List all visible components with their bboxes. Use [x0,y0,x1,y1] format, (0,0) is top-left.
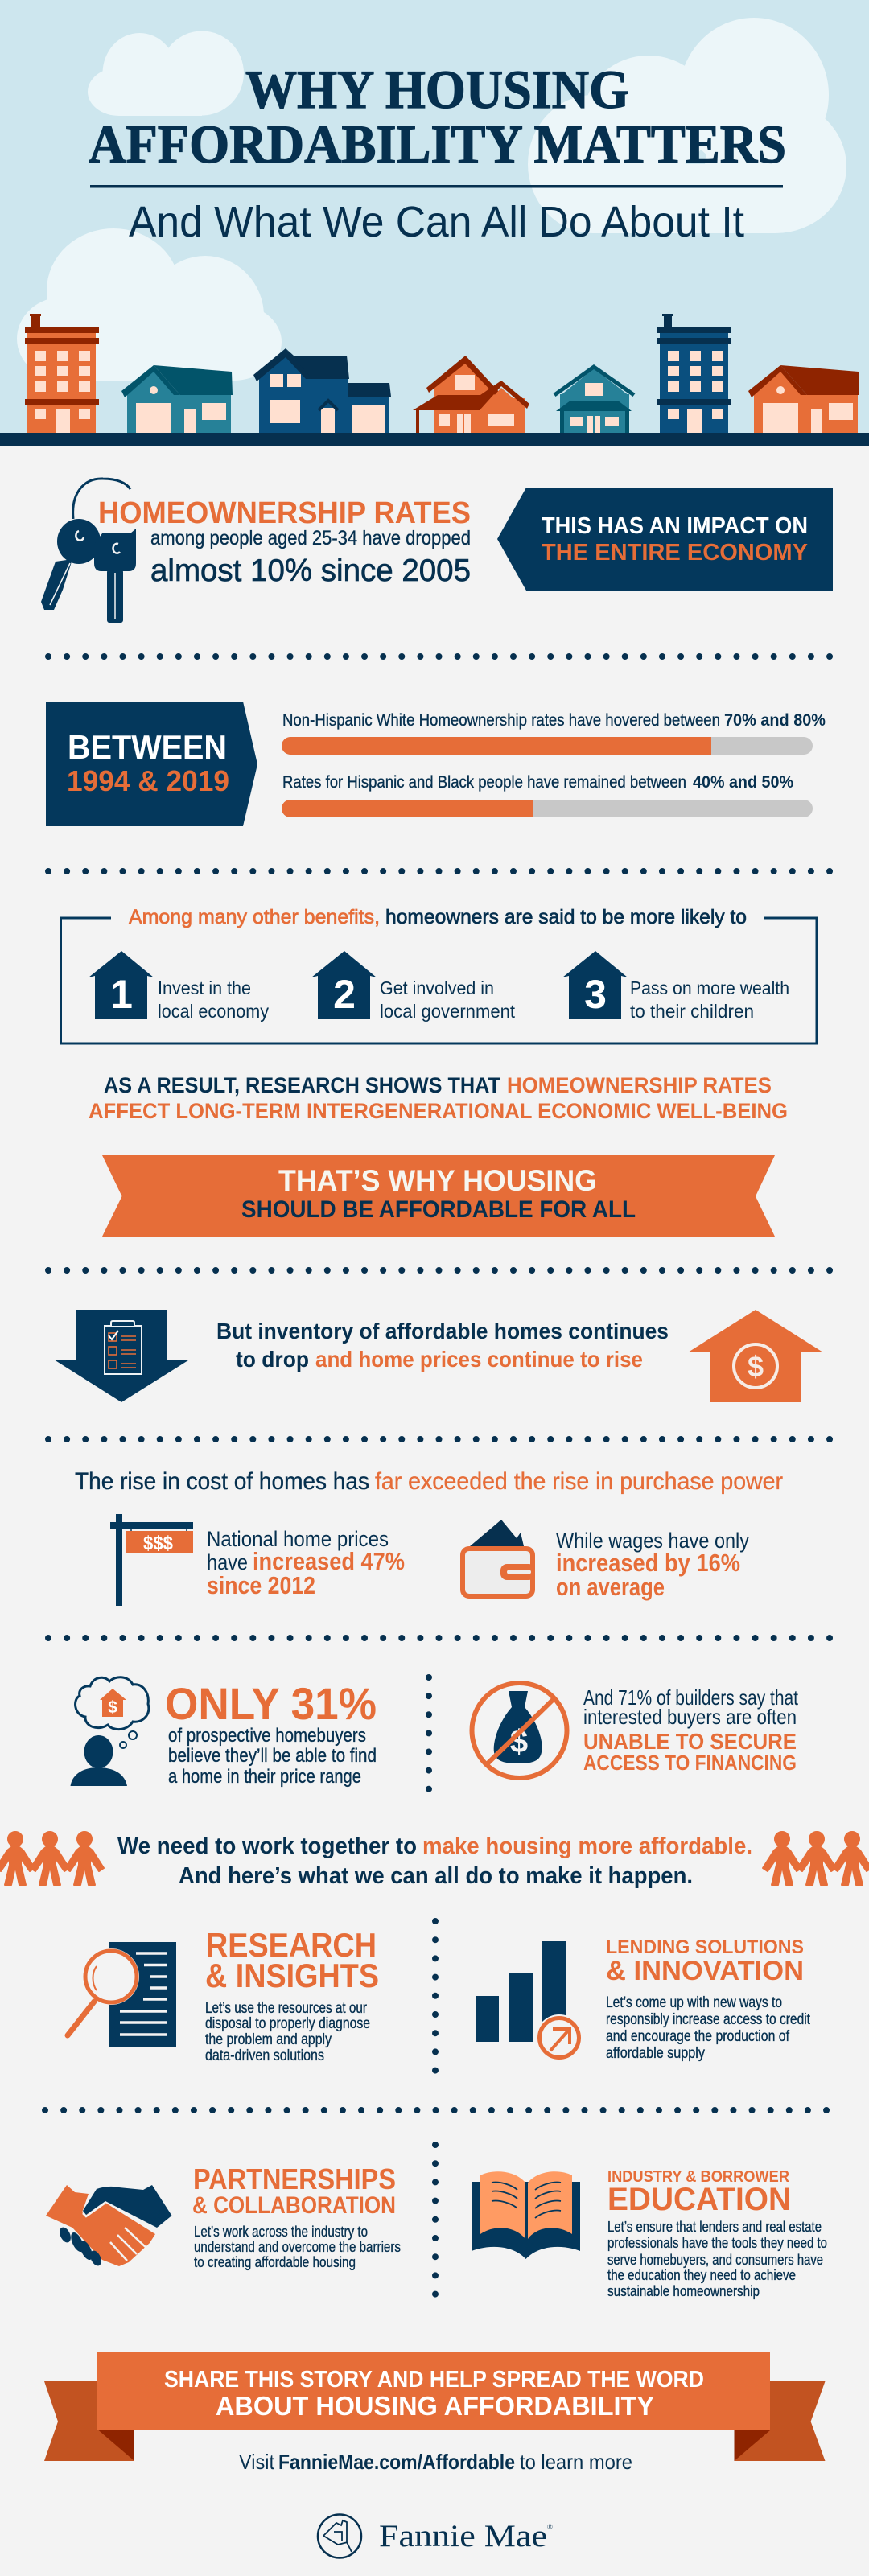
heading: cost versus purchase power: far exceeded the rise in purchase power [375,1468,783,1495]
text: research and insights: Let’s use the resources at our [205,2000,368,2017]
text: lending solutions: Let’s come up with new ways to [606,1994,782,2011]
text: research result: HOMEOWNERSHIP RATES [507,1073,772,1097]
benefit 3 [562,951,789,1022]
icon: price sign [110,1514,193,1606]
text: partnerships: to creating affordable housing [194,2254,356,2270]
benefits heading [129,906,747,928]
text: national home prices: since 2012 [207,1571,315,1599]
icon: keys [41,479,136,623]
icon: person thinking of house [71,1677,149,1786]
cloud: upper left [88,31,244,116]
text: homeownership rates: among people aged 25-34 have dropped [150,527,471,549]
icon: person thinking of house: $ [108,1698,117,1717]
text: lending solutions: LENDING SOLUTIONS [606,1936,804,1958]
building: orange gabled house [413,356,529,433]
icon: no money bag: $ [510,1724,528,1759]
text: builders: UNABLE TO SECURE [583,1729,797,1754]
benefit 1: local economy [158,1001,269,1022]
callout: impact on economy [497,488,833,591]
bar: 70 to 80 percent [282,737,813,755]
text: education: EDUCATION [607,2182,791,2217]
label: hispanic and black: Rates for Hispanic and Black people have remained between [282,773,686,792]
text: education: the education they need to achieve [607,2267,796,2283]
label: white homeownership: Non-Hispanic White Homeownership rates have hovered between [282,711,720,730]
text: education [607,2168,827,2299]
bar: 40 to 50 percent [282,800,813,817]
icon: house with dollar [688,1310,823,1402]
panel: sky header [0,0,869,446]
text: research and insights: disposal to properly diagnose [205,2015,370,2032]
text: builders [583,1685,799,1775]
building: blue house [253,348,391,433]
icon: people right [763,1832,869,1885]
text: education: Let’s ensure that lenders and real estate [607,2219,822,2235]
text: lending solutions: & INNOVATION [606,1956,804,1986]
text: work together: And here’s what we can all do to make it happen. [179,1863,693,1889]
benefit 2: 2 [333,972,356,1017]
text: homeownership rates: HOMEOWNERSHIP RATES [98,496,471,530]
text: national home prices: National home prices [207,1527,389,1551]
benefit 3: 3 [584,972,607,1017]
text: lending solutions: responsibly increase access to credit [606,2011,811,2028]
icon: house with dollar: $ [748,1350,764,1383]
benefit 3: to their children [630,1001,754,1022]
text: visit website: to learn more [520,2450,632,2474]
text: education: sustainable homeownership [607,2283,760,2299]
text: work together: We need to work together to [117,1833,417,1859]
text: only 31 percent: a home in their price range [168,1766,361,1788]
title: WHY HOUSING [245,59,629,120]
banner: should be affordable: SHOULD BE AFFORDABLE FOR ALL [241,1196,636,1223]
text: homeownership rates: almost 10% since 2005 [150,553,471,588]
text: visit website: FannieMae.com/Affordable [278,2450,515,2474]
callout: impact on economy: THIS HAS AN IMPACT ON [542,513,808,539]
title [89,59,786,175]
text: wages [556,1529,749,1601]
icon: wallet [463,1520,535,1596]
text: only 31 percent: believe they’ll be able to find [168,1745,377,1767]
title: AFFORDABILITY MATTERS [89,113,786,175]
text: inventory: But inventory of affordable homes continues [216,1319,669,1344]
text: lending solutions: affordable supply [606,2045,705,2062]
text: research result: AS A RESULT, RESEARCH SHOWS THAT [104,1073,500,1097]
logo: fannie mae [318,2515,553,2558]
banner: should be affordable [102,1155,775,1237]
text: wages: increased by 16% [556,1549,740,1577]
text: inventory: and home prices continue to rise [315,1347,643,1372]
heading: cost versus purchase power [75,1468,783,1495]
logo: fannie mae: ® [547,2523,553,2531]
text: education: professionals have the tools they need to [607,2235,827,2251]
text: partnerships [192,2162,401,2270]
subtitle: And What We Can All Do About It [129,198,744,246]
ground [0,433,869,446]
text: builders: interested buyers are often [583,1705,797,1729]
text: visit website: Visit [239,2450,275,2474]
text: national home prices [207,1527,405,1599]
benefit 3: Pass on more wealth [630,977,789,998]
text: education: serve homebuyers, and consumers have [607,2252,823,2268]
building: blue tower [657,314,731,433]
text: education: INDUSTRY & BORROWER [607,2168,789,2186]
text: wages: While wages have only [556,1529,749,1553]
benefit 1: 1 [110,972,133,1017]
text: lending solutions: and encourage the production of [606,2028,790,2045]
icon: people left [0,1832,104,1885]
benefits heading: homeowners are said to be more likely to [385,906,747,928]
benefit 2: Get involved in [380,977,494,998]
icon: bars with arrow [476,1941,583,2061]
text: only 31 percent: ONLY 31% [165,1678,377,1729]
text: research result: AFFECT LONG-TERM INTERGENERATIONAL ECONOMIC WELL-BEING [89,1099,788,1123]
panel: benefits [61,906,817,1043]
icon: price sign: $$$ [143,1533,174,1554]
banner: share this story [44,2352,826,2461]
text: research and insights: data-driven solutions [205,2047,324,2064]
icon: document and magnifier [68,1942,176,2047]
building: orange tower [25,314,99,433]
text: national home prices: have [207,1550,248,1574]
text: visit website [239,2450,632,2474]
benefit 2 [311,951,516,1022]
text: partnerships: PARTNERSHIPS [193,2162,396,2195]
cloud: lower left [17,228,282,381]
text: work together: make housing more affordable. [422,1833,752,1859]
text: research and insights [205,1926,379,2064]
logo: fannie mae: Fannie Mae [379,2519,547,2553]
text: research and insights: RESEARCH [206,1926,377,1964]
text: builders: ACCESS TO FINANCING [583,1751,797,1775]
text: homeownership rates [98,496,471,588]
callout: impact on economy: THE ENTIRE ECONOMY [542,540,808,566]
heading: cost versus purchase power: The rise in cost of homes has [75,1468,369,1495]
building: teal small house [554,367,634,433]
text: builders: And 71% of builders say that [583,1685,799,1710]
benefit 2: local government [380,1001,516,1022]
text: research and insights: the problem and apply [205,2031,332,2048]
text: wages: on average [556,1573,665,1601]
callout: between 1994 and 2019: 1994 & 2019 [67,764,229,797]
text: partnerships: & COLLABORATION [192,2192,396,2219]
icon: open book [472,2171,580,2259]
text: partnerships: Let’s work across the industry to [194,2224,368,2240]
text: inventory: to drop [236,1347,309,1372]
label: white homeownership: 70% and 80% [724,711,826,730]
text: research and insights: & INSIGHTS [205,1957,379,1994]
icon: handshake [46,2185,172,2268]
text: partnerships: understand and overcome the barriers [194,2239,401,2255]
banner: share this story: SHARE THIS STORY AND HELP SPREAD THE WORD [164,2367,704,2393]
banner: should be affordable: THAT’S WHY HOUSING [278,1164,597,1197]
cloud: upper right [528,18,846,233]
text: national home prices: increased 47% [253,1547,405,1575]
benefits heading: Among many other benefits, [129,906,380,928]
callout: between 1994 and 2019 [46,702,257,826]
text: work together [117,1833,752,1889]
text: only 31 percent: of prospective homebuyers [168,1725,366,1747]
benefit 1 [89,951,269,1022]
label: hispanic and black: 40% and 50% [693,773,793,792]
building: teal house [121,365,233,433]
text: lending solutions [606,1936,811,2062]
benefit 1: Invest in the [158,977,251,998]
icon: no money bag [472,1683,566,1778]
icon: down arrow with checklist [54,1310,190,1402]
banner: share this story: ABOUT HOUSING AFFORDABILITY [216,2391,654,2421]
bar chart: homeownership ranges [282,711,826,817]
callout: between 1994 and 2019: BETWEEN [68,728,227,766]
text: only 31 percent [165,1678,377,1788]
building: orange right house [748,365,859,433]
text: inventory [216,1319,669,1372]
text: research result [89,1073,788,1123]
